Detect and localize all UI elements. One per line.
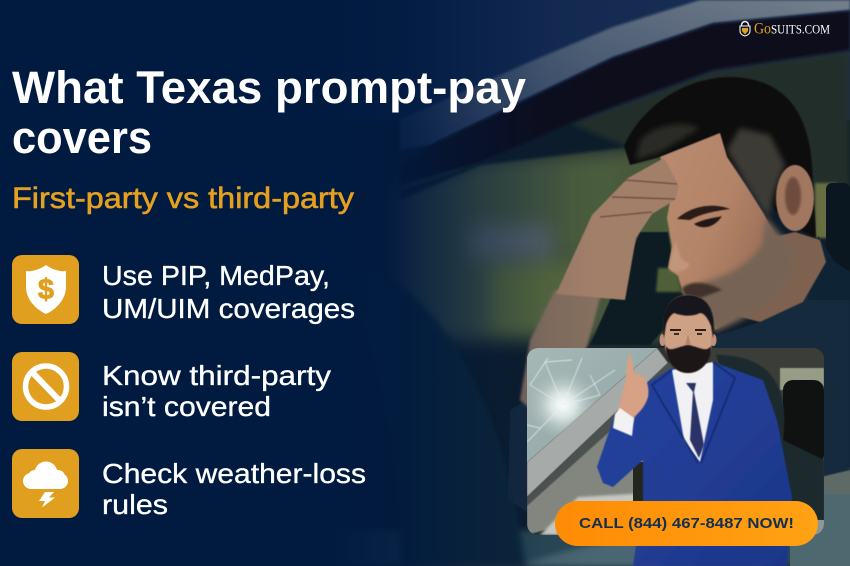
jacket lapels xyxy=(652,362,735,463)
hand on forehead xyxy=(556,158,679,300)
text: weather: Check weather-loss xyxy=(102,458,366,489)
hair xyxy=(624,77,816,238)
dark gap between hand and face xyxy=(590,232,690,345)
text: weather: rules xyxy=(102,489,168,520)
lawyer xyxy=(597,295,792,566)
inset photo: shattered windshield xyxy=(527,348,824,535)
icon: shield with dollar sign xyxy=(12,255,79,324)
title: covers xyxy=(12,112,152,163)
silver door pillar xyxy=(527,348,668,497)
text: third-party xyxy=(102,360,331,422)
call-to-action button: CALL (844) 467-8487 NOW! xyxy=(579,515,794,532)
icon: shield with dollar sign: $ xyxy=(38,274,54,306)
subtitle: First-party vs third-party xyxy=(12,182,354,215)
text: third-party: isn’t covered xyxy=(102,391,271,422)
grey side hair xyxy=(727,128,785,218)
icon: storm cloud xyxy=(12,449,79,518)
roof area top xyxy=(300,0,850,120)
list item: weather xyxy=(12,449,366,520)
list item: third-party xyxy=(12,352,331,422)
lawyer's cuff xyxy=(613,408,634,436)
man's shirt xyxy=(508,262,850,520)
ear xyxy=(776,165,814,231)
title: What Texas prompt-pay xyxy=(12,62,526,113)
raised forearm xyxy=(520,287,603,412)
lower interior and seat strips xyxy=(300,530,850,566)
beard xyxy=(682,216,797,332)
roof pillar xyxy=(400,0,850,150)
text: coverages: Use PIP, MedPay, xyxy=(102,260,330,291)
background photo: man in car xyxy=(300,0,850,566)
text: weather xyxy=(102,458,366,520)
face xyxy=(660,133,797,330)
finger creases xyxy=(600,180,677,217)
list item: coverages xyxy=(12,255,355,324)
lawyer's suit xyxy=(597,362,792,566)
dark roof strip xyxy=(400,11,850,185)
logo: GoSuits.com xyxy=(740,20,830,38)
lawyer's hair xyxy=(663,295,714,338)
text: third-party: Know third-party xyxy=(102,360,331,391)
lawyer's head xyxy=(663,295,713,373)
logo: GoSuits.com: SUITS.COM xyxy=(771,22,830,36)
lawyer's raised hand xyxy=(617,353,648,420)
car window view xyxy=(395,147,690,340)
steering wheel xyxy=(345,270,525,566)
shirt and tie xyxy=(672,362,713,462)
nose highlight xyxy=(669,240,690,272)
cabin interior upper right xyxy=(570,50,850,240)
lawyer's brows and eyes xyxy=(670,329,706,331)
logo: GoSuits.com: Go xyxy=(754,20,771,38)
car interior xyxy=(708,348,824,460)
brow and eye xyxy=(677,206,730,220)
title xyxy=(12,62,526,163)
call-to-action button xyxy=(555,501,818,546)
text: coverages xyxy=(102,260,355,324)
windshield glass xyxy=(527,348,657,462)
icon: prohibition sign xyxy=(12,352,79,421)
text: coverages: UM/UIM coverages xyxy=(102,293,355,324)
dark A-pillar xyxy=(400,90,720,200)
neck xyxy=(715,232,826,322)
icon: logo padlock shield xyxy=(740,22,750,36)
lawyer's beard xyxy=(666,345,711,373)
